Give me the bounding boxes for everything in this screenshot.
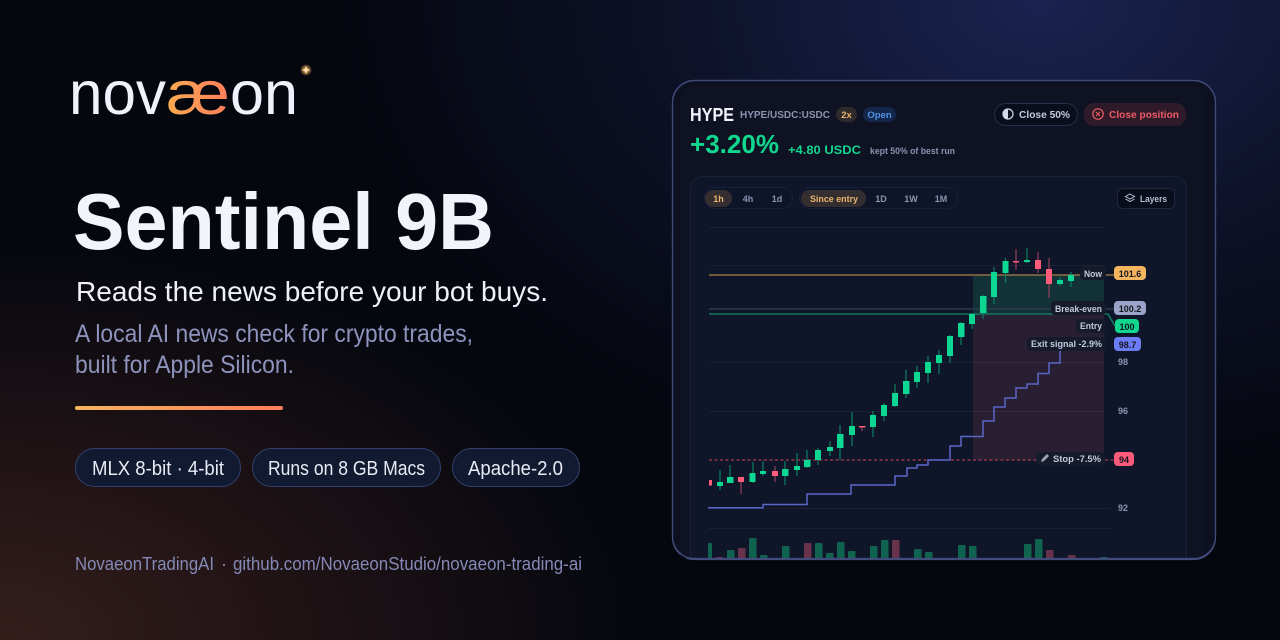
card header: symbol and pair: HYPE/USDC:USDC [740,109,830,121]
axis labels: 92 [1118,503,1128,513]
marker: now [1080,266,1146,280]
accent rule [75,406,283,410]
pill: Apache-2.0 [452,448,580,486]
timeframe selector: ranges [800,188,958,208]
pill: MLX 8-bit 4-bit [76,448,240,486]
volume bars [708,538,1108,559]
subtitle [75,320,473,379]
marker: break-even: 100.2 [1119,304,1141,314]
subtitle: built for Apple Silicon. [75,351,294,379]
timeframe selector: intervals: 4h [743,194,753,204]
marker: stop [1036,452,1134,466]
panel: chart [690,176,1186,576]
badge: 2x [836,107,857,122]
footer links: github.com/NovaeonStudio/novaeon-trading-ai [233,554,582,574]
timeframe selector: intervals [704,188,792,208]
badge: 2x: 2x [841,110,852,121]
green bodies [717,260,1074,486]
marker: break-even [1051,301,1146,315]
icon: logo star [300,64,312,76]
button: Close position [1084,103,1186,126]
button: Close 50% [994,104,1078,126]
tagline: Reads the news before your bot buys. [76,276,548,307]
profit figures: +3.20% [690,129,779,159]
marker: entry [1076,319,1139,333]
panel: trade card [672,80,1216,576]
footer links: NovaeonTradingAI [75,554,214,574]
logo: novaeon wordmark: nov [69,59,166,127]
red bodies [709,260,1052,486]
marker: stop: 94 [1119,455,1129,465]
timeframe selector: ranges: 1D [875,194,887,204]
badge: Open: Open [867,110,892,121]
line: exit signal trail [708,351,1060,508]
profit figures: kept 50% of best run [870,146,955,157]
timeframe selector: ranges: Since entry [810,194,858,204]
pill: Runs on 8 GB Macs [252,448,440,486]
timeframe selector: ranges: 1M [935,194,947,204]
line: entry [709,314,1115,326]
zone: risk [973,313,1104,460]
marker: break-even: Break-even [1055,304,1102,314]
card header: symbol and pair [691,108,830,121]
line: break-even [709,308,1114,310]
timeframe selector: intervals: 1h [713,194,724,204]
pill: Apache-2.0: Apache-2.0 [468,458,563,480]
card header: symbol and pair: HYPE [690,105,734,125]
timeframe selector: intervals: 1d [772,194,782,204]
button: Layers: Layers [1140,194,1167,204]
axis labels: 96 [1118,406,1128,416]
candlesticks [709,248,1074,494]
red wicks [741,249,1049,494]
button: Layers [1118,188,1174,208]
green wicks [720,248,1071,490]
marker: exit signal: Exit signal -2.9% [1031,339,1102,349]
marker: entry: 100 [1119,322,1135,332]
marker: now: 101.6 [1119,269,1141,279]
badge: Open [863,107,896,122]
marker: now: Now [1084,269,1103,279]
subtitle: A local AI news check for crypto trades, [75,320,473,348]
marker: stop: Stop -7.5% [1053,454,1101,464]
logo: novaeon wordmark: æ [166,60,230,128]
marker: exit signal [1027,337,1141,351]
timeframe selector: ranges: 1W [904,194,918,204]
title: Sentinel 9B [73,177,494,266]
logo: novaeon wordmark: on [230,59,298,127]
button: Close position: Close position [1109,109,1179,121]
button: Close 50%: Close 50% [1019,109,1071,121]
pill: MLX 8-bit 4-bit: MLX 8-bit · 4-bit [92,458,224,480]
logo: novaeon wordmark [69,59,298,128]
profit figures [691,134,954,156]
footer links: · [221,554,227,574]
marker: exit signal: 98.7 [1119,340,1136,350]
line: now price [709,274,1114,276]
axis labels: 98 [1118,357,1128,367]
footer links [75,554,582,574]
pill: Runs on 8 GB Macs: Runs on 8 GB Macs [268,458,425,480]
zone: profit [973,275,1104,313]
marker: entry: Entry [1080,321,1102,331]
line: stop [709,459,1114,461]
profit figures: +4.80 USDC [788,143,861,157]
axis labels [1118,357,1128,513]
